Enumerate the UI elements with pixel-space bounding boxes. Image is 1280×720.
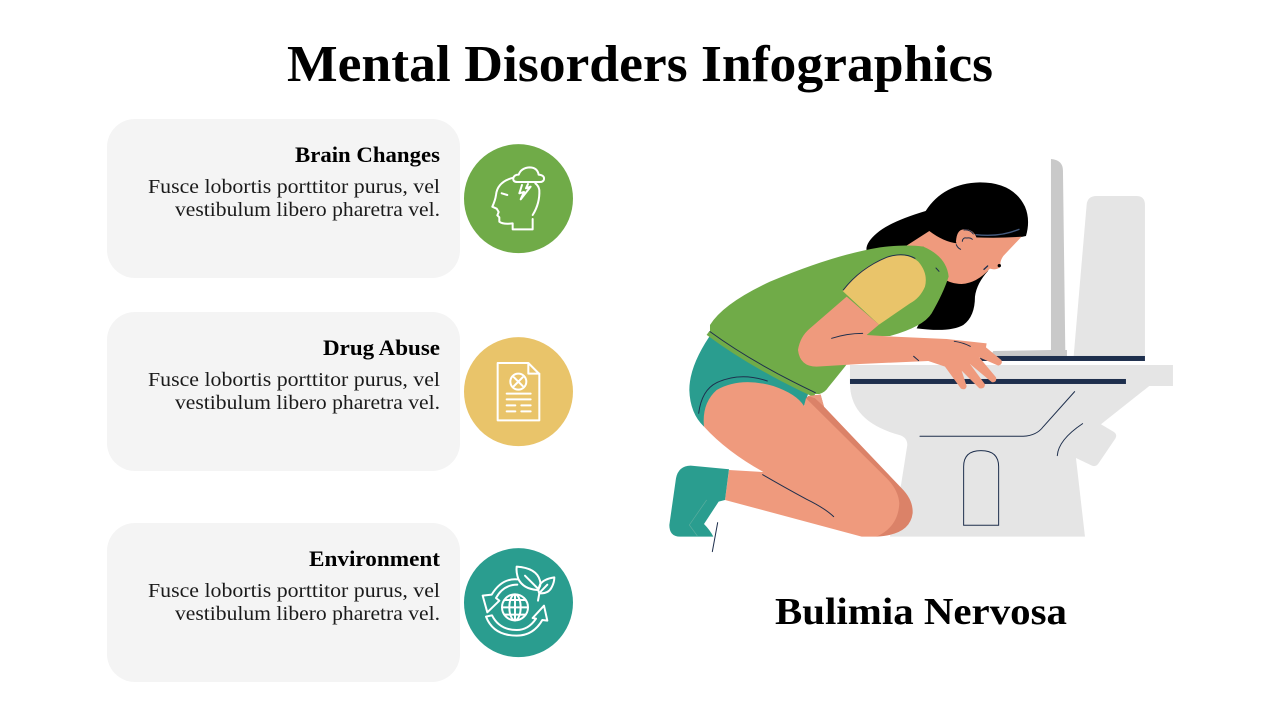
arm and hand	[798, 297, 1002, 389]
text block: environment: vestibulum libero pharetra vel.	[175, 603, 440, 625]
text block: brain changes: vestibulum libero pharetra vel.	[175, 199, 440, 221]
panel: environment	[107, 523, 460, 682]
text block: drug abuse: Fusce lobortis porttitor purus, vel	[148, 369, 440, 391]
text block: drug abuse: vestibulum libero pharetra vel.	[175, 392, 440, 414]
heading: drug abuse: Drug Abuse	[323, 335, 440, 360]
label: bulimia nervosa: Bulimia Nervosa	[775, 591, 1067, 633]
face and neck	[905, 229, 1022, 284]
green top	[708, 245, 949, 395]
shoe	[669, 466, 729, 552]
toilet	[850, 159, 1173, 537]
text block: brain changes	[148, 176, 440, 221]
text block: environment: Fusce lobortis porttitor purus, vel	[148, 580, 440, 602]
bent leg	[699, 377, 913, 537]
illustration: woman over toilet	[669, 159, 1173, 552]
shorts	[689, 337, 808, 427]
yellow sleeve	[843, 255, 926, 325]
icon: globe with recycling arrows and leaves	[464, 548, 573, 657]
heading: brain changes: Brain Changes	[295, 142, 440, 167]
title: Mental Disorders Infographics	[287, 36, 993, 93]
panel: drug abuse	[107, 312, 460, 471]
garment and arm lines	[832, 255, 970, 361]
hair	[866, 182, 1028, 330]
text block: brain changes: Fusce lobortis porttitor purus, vel	[148, 176, 440, 198]
heading: environment: Environment	[309, 546, 441, 571]
text block: drug abuse	[148, 369, 440, 414]
text block: environment	[148, 580, 440, 625]
icon: head with storm cloud	[464, 144, 573, 253]
panel: brain changes	[107, 119, 460, 278]
icon: document with crossed pill	[464, 337, 573, 446]
